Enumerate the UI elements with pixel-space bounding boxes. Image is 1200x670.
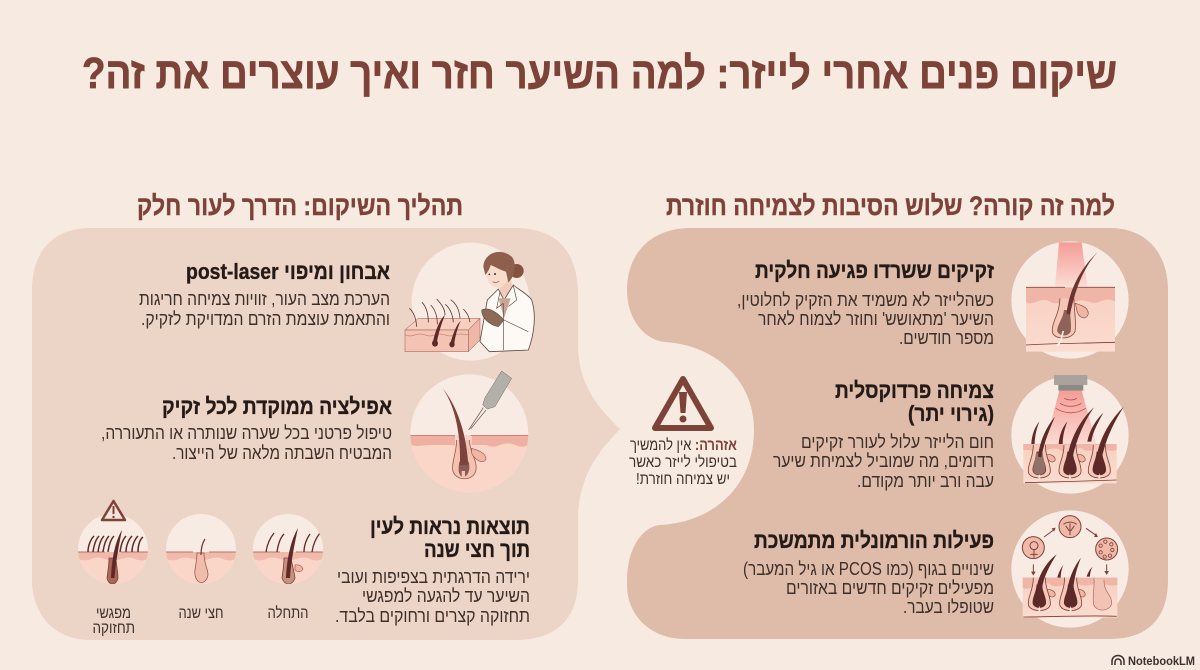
text: cause 1 [737, 258, 994, 348]
text: cause 3: מפעילים זקיקים חדשים באזורים [786, 578, 994, 598]
text: step 3: תוצאות נראות לעין [370, 514, 530, 539]
label: half year: חצי שנה [178, 605, 224, 622]
heading: recovery process: תהליך השיקום: הדרך לעור חלק [137, 191, 463, 221]
warning text: בטיפולי לייזר כאשר [629, 454, 737, 471]
cause 1 [737, 241, 1129, 359]
label: start: התחלה [268, 605, 308, 622]
warning callout [629, 379, 737, 488]
icon: start stage [253, 514, 323, 587]
text: step 1: אבחון ומיפוי post-laser [186, 259, 390, 284]
icon: laser stimulating follicles [1011, 375, 1129, 494]
warning text: אזהרה: אין להמשיך [630, 437, 737, 454]
text: step 2: המבטיח השבתה מלאה של הייצור. [172, 443, 392, 463]
text: cause 1: השיער 'מתאושש' וחוזר לצמוח לאחר [758, 309, 994, 329]
text: step 2: אפילציה ממוקדת לכל זקיק [162, 394, 392, 419]
icon: clinician examining skin [405, 243, 534, 361]
text: cause 3: שינויים בגוף (כמו PCOS או גיל המעבר) [743, 559, 994, 579]
text: step 1 [139, 259, 390, 329]
heading: why it happens: למה זה קורה? שלוש הסיבות לצמיחה חוזרת [666, 191, 1115, 221]
text: cause 3 [743, 528, 994, 617]
icon: needle epilation [410, 371, 529, 495]
watermark: NotebookLM: NotebookLM [1128, 656, 1195, 668]
label: maintenance sessions: מפגשי [96, 605, 131, 622]
text: cause 2: רדומים, מה שמוביל לצמיחת שיער [773, 451, 994, 471]
text: cause 1: מספר חודשים. [899, 328, 994, 348]
icon: hormonal activity [1011, 510, 1129, 628]
text: step 1: והתאמת עוצמת הזרם המדויקת לזקיק. [141, 309, 390, 329]
text: step 3 [335, 514, 530, 626]
text: cause 1: כשהלייזר לא משמיד את הזקיק לחלוטין, [737, 290, 994, 310]
panel: causes background [627, 228, 1168, 639]
icon: half year stage [166, 514, 236, 587]
warning text: יש צמיחה חוזרת! [636, 471, 730, 488]
text: step 1: הערכת מצב העור, זוויות צמיחה חריגות [139, 289, 390, 309]
text: cause 2: חום הלייזר עלול לעורר זקיקים [801, 432, 994, 452]
step 1 [139, 243, 534, 361]
step 2 [101, 371, 529, 495]
text: step 2 [101, 394, 392, 463]
icon: small warning [102, 501, 125, 520]
text: step 3: ירידה הדרגתית בצפיפות ועובי [337, 567, 530, 587]
warning text [629, 437, 737, 488]
icon: partially damaged follicle [1011, 241, 1129, 359]
panel: recovery process background [32, 228, 620, 640]
text: step 2: טיפול פרטני בכל שערה שנותרה או התעוררה, [101, 423, 392, 443]
text: cause 1: זקיקים ששרדו פגיעה חלקית [755, 258, 994, 283]
text: cause 2 [773, 378, 994, 491]
cause 3 [743, 510, 1129, 628]
text: cause 3: שטופלו בעבר. [903, 597, 994, 617]
text: cause 2: צמיחה פרדוקסלית [835, 378, 994, 403]
text: cause 2: (גירוי יתר) [908, 401, 994, 426]
cause 2 [773, 375, 1129, 494]
text: cause 2: עבה ורב יותר מקודם. [857, 471, 994, 491]
icon: maintenance stage [78, 514, 148, 587]
label: maintenance sessions: תחזוקה [92, 620, 135, 637]
label: maintenance sessions [92, 605, 135, 637]
text: step 3: תוך חצי שנה [424, 537, 530, 562]
step 3 [78, 501, 530, 637]
text: cause 3: פעילות הורמונלית מתמשכת [754, 528, 994, 553]
text: step 3: תחזוקה קצרים ורחוקים בלבד. [335, 606, 530, 626]
icon: warning triangle [655, 379, 711, 428]
text: step 3: השיער עד להגעה למפגשי [362, 586, 530, 606]
